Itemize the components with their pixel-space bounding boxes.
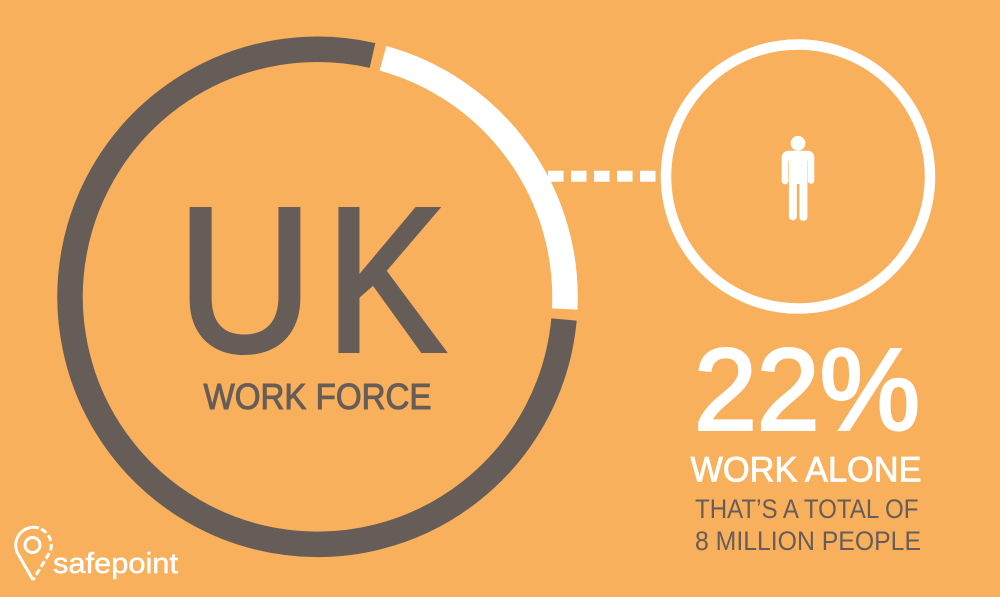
- heading: UK: K: [326, 165, 445, 394]
- text: 8 million people: 8 MILLION PEOPLE: [695, 526, 921, 556]
- white arc: 22 percent: [383, 58, 565, 309]
- text: that's a total of: THAT’S A TOTAL OF: [695, 494, 918, 524]
- logo: safepoint: [16, 527, 178, 580]
- dark arc: remaining work force: [70, 49, 564, 544]
- text: work alone: WORK ALONE: [690, 450, 922, 490]
- label: work force: WORK FORCE: [204, 376, 432, 417]
- dashed connector: [548, 171, 656, 182]
- wordmark: safepoint: [53, 548, 178, 580]
- donut chart: UK work force: [70, 49, 565, 544]
- circle: person highlight: [666, 44, 930, 308]
- heading: UK: [178, 165, 445, 394]
- heading: UK: U: [178, 165, 313, 394]
- icon: dashed map pin: [16, 527, 51, 580]
- icon: person: [782, 136, 814, 221]
- statistic: 22 percent: 22%: [694, 324, 920, 454]
